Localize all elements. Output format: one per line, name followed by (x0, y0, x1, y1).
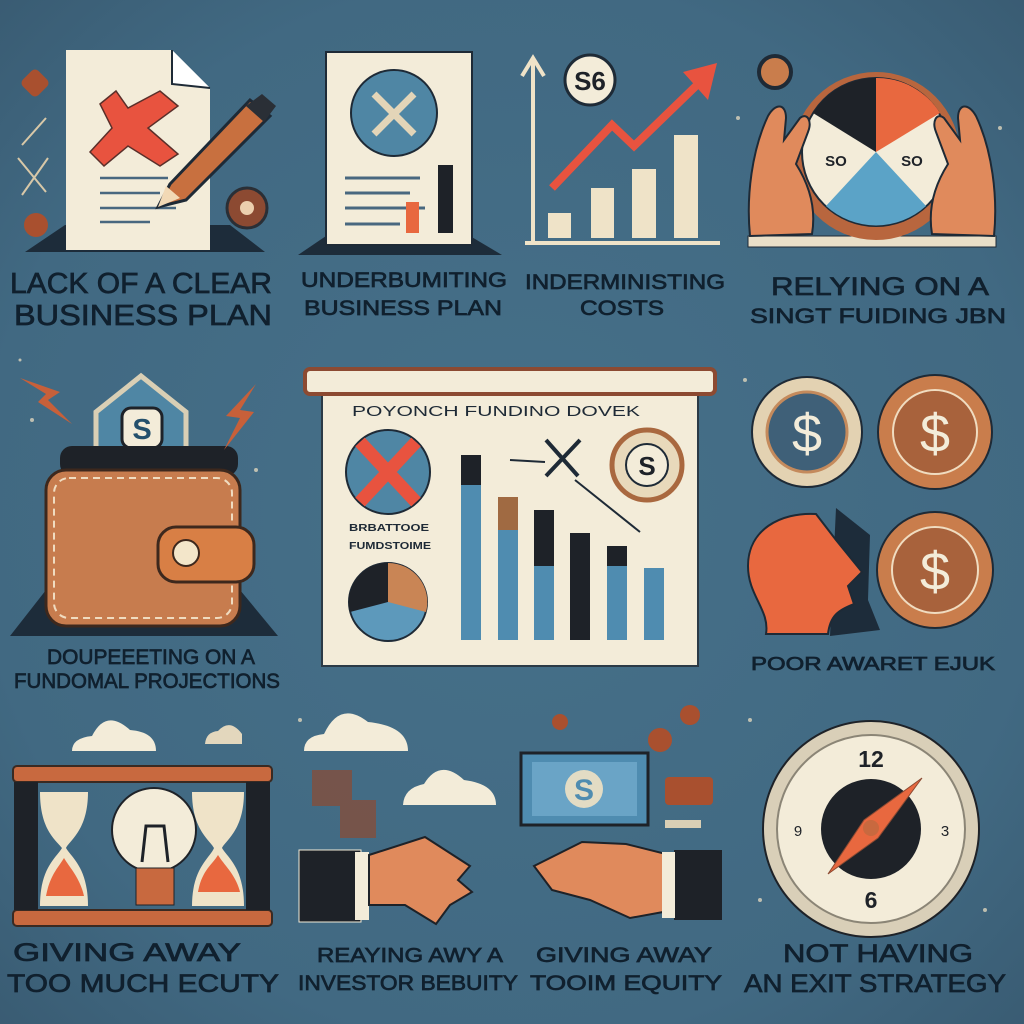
label: FUMDSTOIME (349, 540, 431, 552)
panel: underestimating costs (522, 55, 725, 320)
heading: GIVING AWAY (13, 939, 241, 967)
label (349, 522, 431, 552)
shadow (10, 590, 278, 636)
icon: coin top left: $ (792, 404, 822, 464)
icon: pie chart: SO (825, 153, 847, 170)
chart: rising bars and arrow (522, 58, 720, 245)
icon: clock: 9 (794, 823, 802, 840)
icon: document (66, 50, 210, 250)
shadow (25, 225, 265, 252)
icon: sleeve (299, 850, 369, 922)
panel: investor handshake (298, 713, 518, 995)
icon: dollar shield (96, 376, 186, 450)
panel: exit strategy clock (744, 721, 1006, 998)
icon: banknote (521, 753, 648, 825)
icon: sleeve (662, 850, 722, 920)
icon: hourglass left (14, 782, 88, 910)
panel: underestimating costs: COSTS (580, 297, 664, 320)
panel: investor handshake: INVESTOR BEBUITY (298, 972, 518, 995)
icon: right hand (931, 106, 995, 236)
icon: clock: 3 (941, 823, 949, 840)
panel: hourglasses and bulb (7, 720, 279, 998)
cloud top (304, 713, 408, 751)
heading: GIVING AWAY (536, 944, 712, 967)
board (322, 386, 698, 666)
label: BRBATTOOE (349, 522, 429, 534)
panel: underestimating business plan (298, 52, 507, 320)
icon: clock: 6 (865, 887, 877, 913)
heading: DOUPEEETING ON A (47, 646, 255, 669)
panel: money and open hand: TOOIM EQUITY (530, 972, 722, 995)
icon: dollar shield: S (132, 414, 152, 446)
icon: sparks (20, 378, 256, 450)
cloud mid (403, 770, 496, 805)
icon: price badge: S6 (574, 66, 606, 96)
arrow: trend (510, 460, 640, 532)
icon: coin top left (752, 377, 862, 487)
icon: small decorations (18, 67, 267, 237)
heading: INDERMINISTING (525, 271, 725, 294)
icon: coin lower (877, 512, 993, 628)
icon: coin: S (638, 451, 656, 481)
icon: wallet (46, 446, 254, 626)
cloud small (205, 725, 242, 744)
heading: POYONCH FUNDINO DOVEK (352, 403, 640, 420)
icon: hand (369, 837, 472, 924)
panel: central funding board (305, 369, 715, 666)
icon: coin top right: $ (920, 404, 950, 464)
bar chart (461, 455, 664, 640)
icon: cross (546, 440, 580, 476)
icon: coin top right (878, 375, 992, 489)
icon: clock: 12 (858, 746, 884, 772)
panel: lack of a clear business plan (10, 50, 276, 332)
icon: coin (612, 430, 682, 500)
panel: poor awareness (748, 375, 995, 674)
icon: red cross (90, 91, 178, 166)
shelf (748, 236, 996, 247)
panel: lack of a clear business plan: BUSINESS PLAN (14, 300, 272, 332)
panel: wallet: FUNDOMAL PROJECTIONS (14, 670, 280, 693)
shadow (298, 236, 502, 255)
icon: head profile (748, 514, 862, 634)
icon: pie chart: SO (901, 153, 923, 170)
icon: hourglass right (192, 782, 270, 910)
icon: banknote: S (574, 774, 594, 807)
icon: red cross (346, 430, 430, 514)
panel: underestimating business plan: BUSINESS PLAN (304, 297, 502, 320)
icon: sketch (312, 770, 376, 838)
icon: decorations (552, 705, 713, 828)
icon: open hand (534, 842, 674, 918)
panel: hourglasses and bulb: TOO MUCH ECUTY (7, 970, 279, 998)
icon: document (326, 52, 472, 245)
roller (305, 369, 715, 394)
shadow (830, 508, 880, 636)
pie chart (349, 563, 427, 641)
icon: frame (13, 766, 272, 926)
heading: LACK OF A CLEAR (10, 268, 272, 300)
panel: exit strategy clock: AN EXIT STRATEGY (744, 970, 1006, 998)
icon: clock (763, 721, 979, 937)
icon: light bulb (112, 788, 196, 905)
cloud (72, 720, 156, 751)
heading: REAYING AWY A (317, 945, 504, 967)
panel: money and open hand (521, 705, 722, 995)
heading: RELYING ON A (771, 273, 989, 301)
icon: left hand (749, 106, 813, 236)
heading: POOR AWARET EJUK (751, 654, 995, 674)
heading: NOT HAVING (783, 940, 973, 968)
icon: coin lower: $ (920, 542, 950, 602)
icon: price badge (565, 55, 615, 105)
icon: pen (158, 94, 276, 207)
icon: crossed circle (351, 70, 437, 156)
heading: UNDERBUMITING (301, 269, 507, 292)
panel: relying on a single funding: SINGT FUIDING JBN (750, 305, 1006, 328)
panel: relying on a single funding (748, 56, 1006, 328)
icon: pie chart (792, 72, 960, 240)
icon: small coin (759, 56, 791, 88)
panel: wallet (10, 376, 280, 693)
